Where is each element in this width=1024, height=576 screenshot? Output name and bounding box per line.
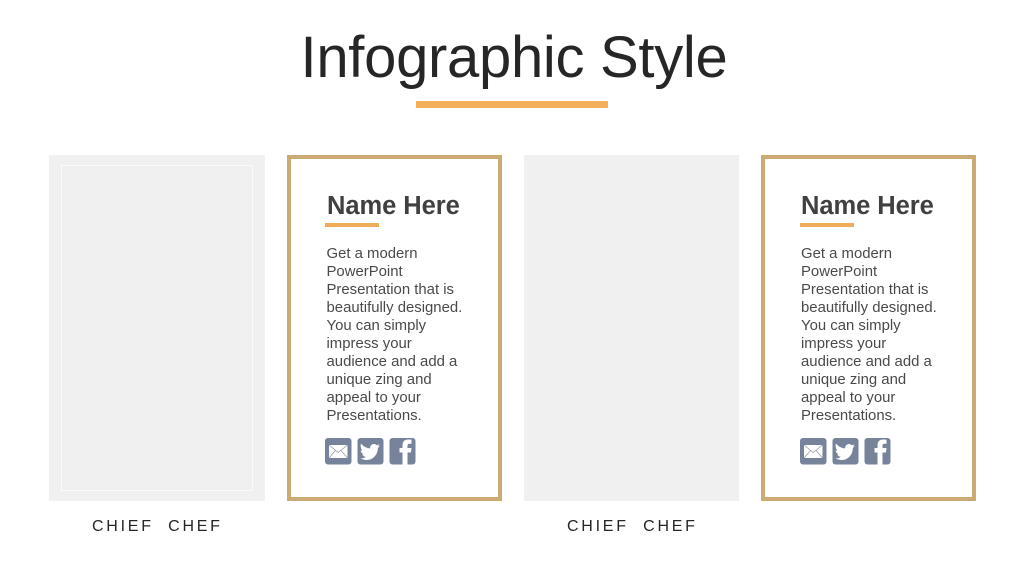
body text: Presentations. [801,408,896,424]
body text: audience and add a [801,354,932,370]
icon: twitter [832,438,858,464]
body text: You can simply [326,318,426,334]
placeholder inner frame [61,165,253,491]
body text: impress your [326,336,412,352]
body text: appeal to your [801,390,895,406]
name heading: Name Here [801,192,934,220]
name underline [325,223,379,227]
title: Infographic Style [301,25,727,90]
icon: mail [325,438,352,464]
body text: PowerPoint [326,264,403,280]
panel: left image placeholder [49,155,265,501]
body text [801,246,937,424]
body text: Get a modern [801,246,892,262]
panel: right image placeholder [524,155,739,501]
icon: facebook [390,438,416,464]
body text [326,246,462,424]
left role label: CHIEF CHEF [92,518,223,535]
body text: beautifully designed. [326,300,462,316]
title underline [416,101,608,108]
body text: PowerPoint [801,264,877,280]
icon: facebook [864,438,890,464]
panel: right profile card [761,155,976,501]
body text: Presentations. [326,408,422,424]
name underline [800,223,854,227]
panel: left profile card [287,155,502,501]
body text: Get a modern [326,246,418,262]
body text: Presentation that is [326,282,454,298]
body text: unique zing and [801,372,906,388]
body text: unique zing and [326,372,432,388]
body text: appeal to your [326,390,421,406]
body text: beautifully designed. [801,300,937,316]
body text: audience and add a [326,354,457,370]
right role label: CHIEF CHEF [567,518,698,535]
icon: twitter [358,438,384,464]
body text: Presentation that is [801,282,928,298]
social icons [325,438,416,464]
body text: You can simply [801,318,901,334]
name heading: Name Here [327,192,460,220]
social icons [800,438,890,464]
icon: mail [800,438,826,464]
body text: impress your [801,336,886,352]
